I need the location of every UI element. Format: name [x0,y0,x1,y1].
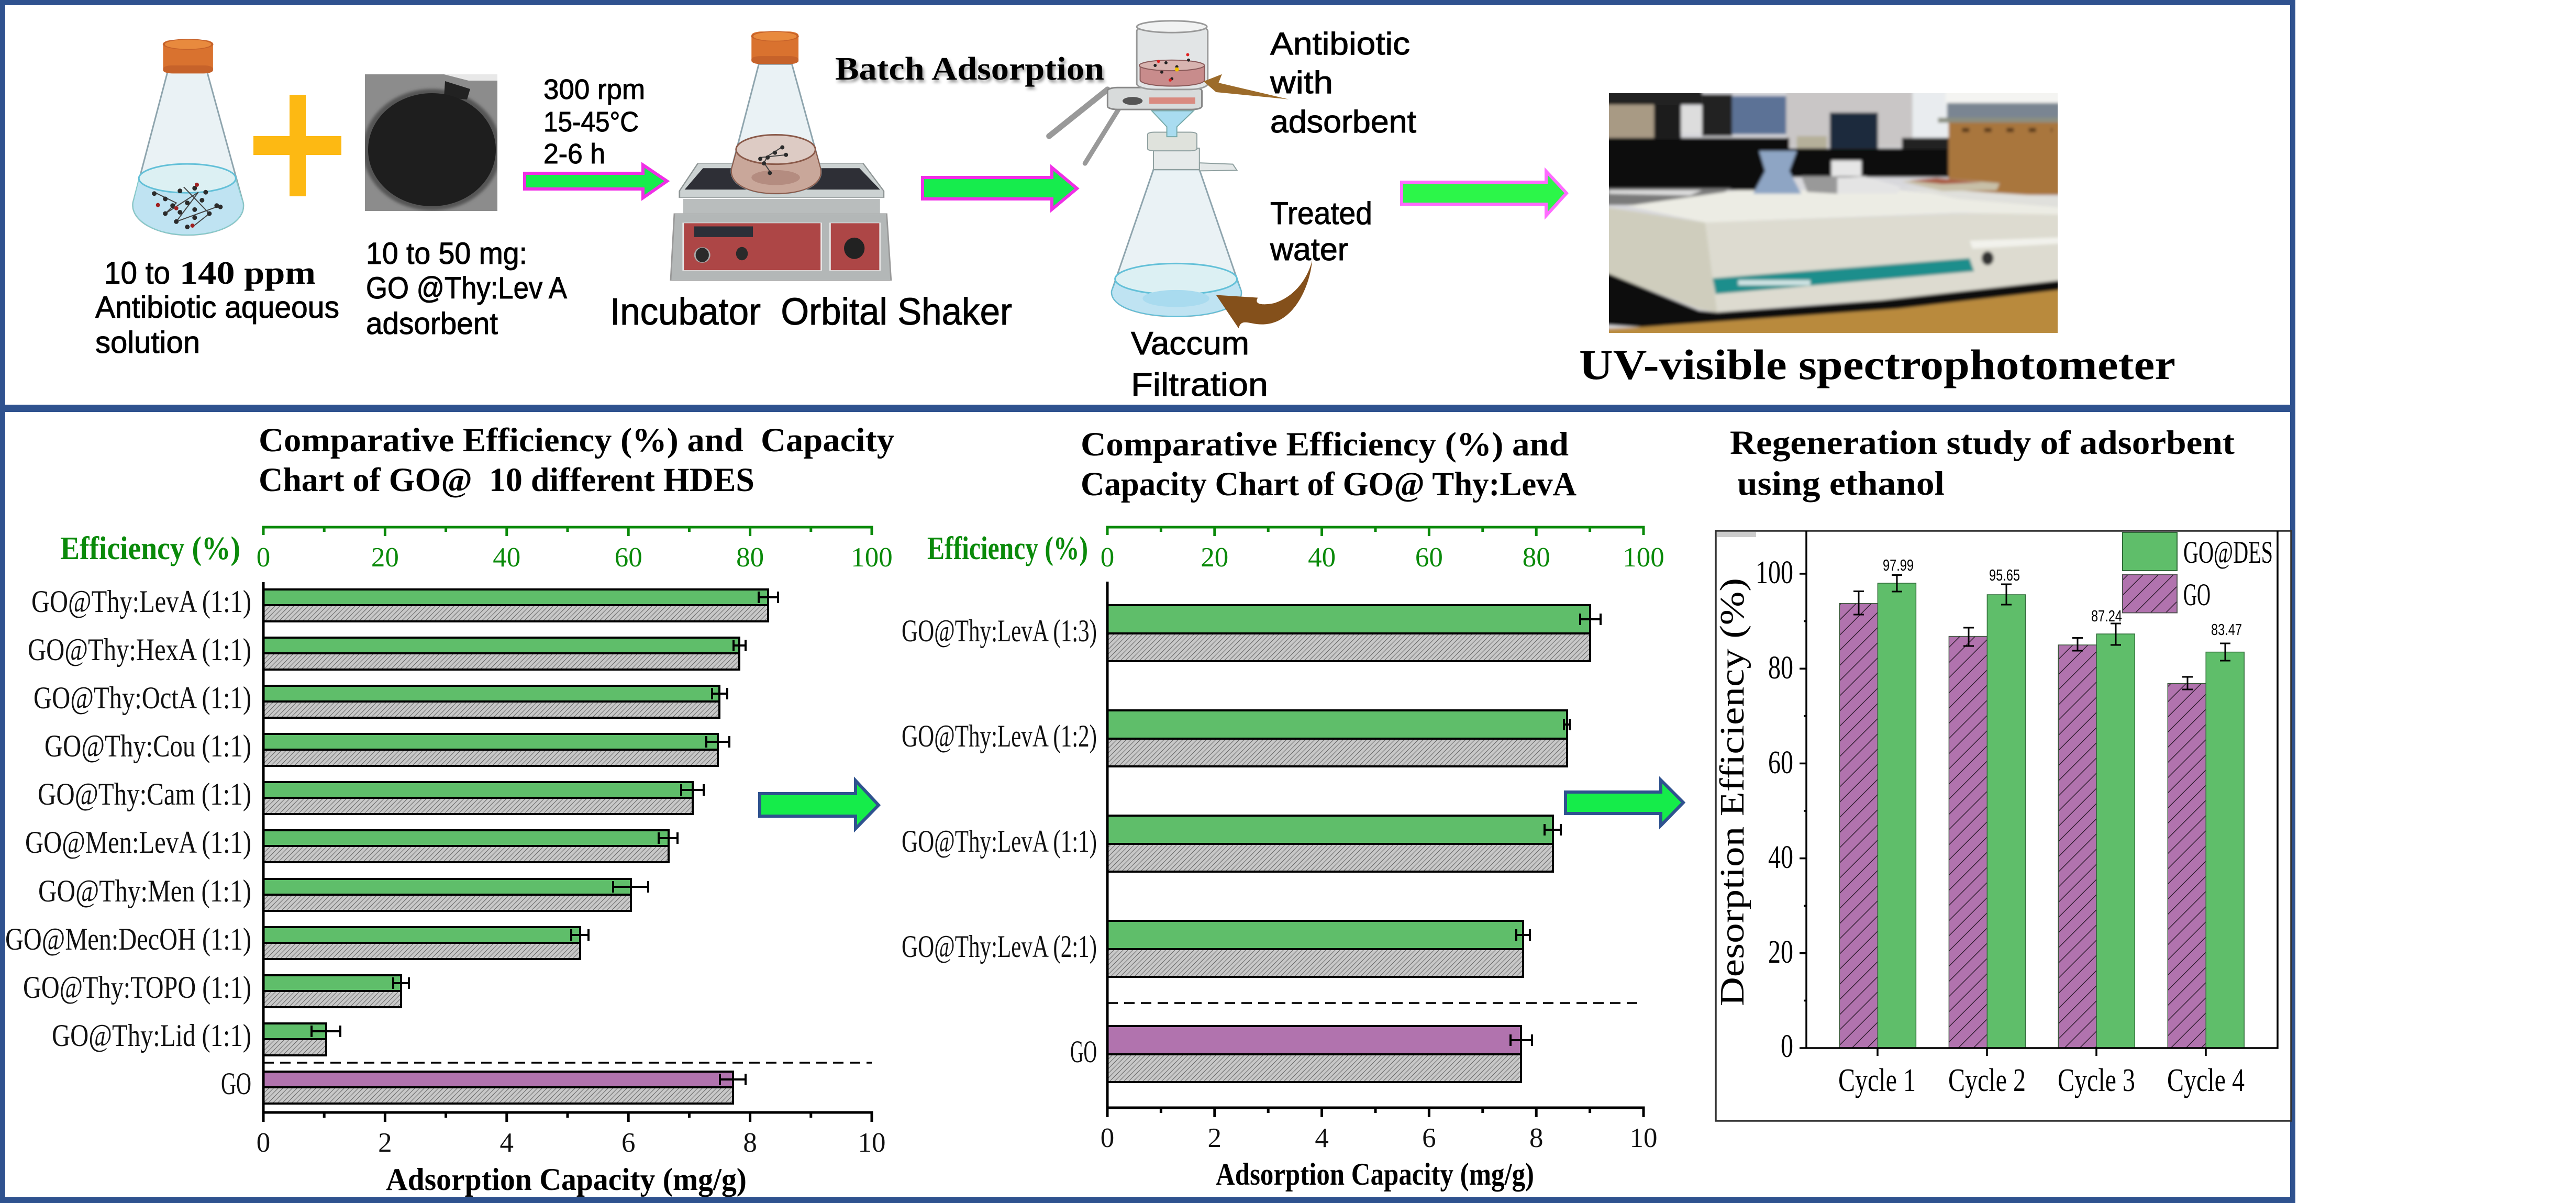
axis: capacity bottom axis: Adsorption Capacity (mg/g) [386,1162,747,1197]
axis labels: desorption y: 100 [1756,555,1793,591]
panel: regeneration study [1713,424,2291,1121]
icon: incubator orbital shaker [671,163,891,281]
axis: efficiency top axis: 20 [371,542,399,573]
labels: HDES categories: GO@Thy:HexA (1:1) [28,632,251,667]
axis: efficiency top axis: 80 [1523,542,1550,573]
chart: desorption bars GO [1839,604,2206,1048]
text: shaking conditions: 15-45°C [543,106,639,138]
arrow: to shaker [525,165,667,198]
heading: chart 1 title: Chart of GO@ 10 different HDES [259,461,754,499]
axis: efficiency top axis: 0 [257,542,270,573]
chart: desorption error bars [1853,575,2230,689]
axis: capacity bottom axis: 10 [1629,1123,1658,1153]
axis labels: desorption y: 20 [1768,934,1793,970]
arrow: treated water pointer [1216,260,1312,328]
axis labels: cycles: Cycle 2 [1948,1063,2026,1098]
text: treated water [1270,196,1372,267]
axis labels: cycles: Cycle 1 [1838,1063,1916,1098]
labels: ratio categories: GO [1070,1034,1097,1069]
axis: capacity bottom axis: 4 [500,1128,514,1158]
heading: chart 2 title [1081,426,1576,503]
text: shaker label: Incubator Orbital Shaker [610,291,1012,333]
value labels: 83.47 [2211,620,2242,639]
labels: HDES categories: GO@Thy:LevA (1:1) [31,584,251,619]
axis labels: cycles: Cycle 4 [2167,1063,2245,1098]
text: treated water: Treated [1270,196,1372,231]
text: antibiotic with adsorbent [1270,26,1416,139]
chart: ratio bars [1107,605,1590,1082]
arrow: to spectrophotometer [1402,171,1567,216]
value labels: 87.24 [2091,607,2122,625]
axis: efficiency top axis [60,527,893,573]
heading: UV-visible spectrophotometer: UV-visible spectrophotometer [1579,341,2175,388]
chart: ratio error bars [1511,614,1601,1046]
arrow: adsorbent pointer [1204,74,1289,99]
labels: ratio categories: GO@Thy:LevA (1:2) [902,719,1097,753]
labels: HDES categories: GO@Men:LevA (1:1) [25,825,251,860]
arrow: to chart 2 [760,781,879,829]
axis labels: desorption y: 80 [1768,650,1793,686]
labels: HDES categories: GO@Thy:Cou (1:1) [45,729,251,763]
icon: flask on shaker [731,31,821,194]
icon: vacuum filtration apparatus [1049,21,1241,316]
legend [2123,532,2273,612]
legend line: baseline separator [263,1062,872,1064]
heading: chart 1 title: Comparative Efficiency (%) and Capacity [259,421,894,459]
axis labels: cycles [1838,1063,2245,1098]
heading: chart 3 title [1730,424,2235,503]
chart box [1716,531,2291,1121]
axis: efficiency top axis: 20 [1201,542,1228,573]
text: adsorbent dose: adsorbent [366,307,498,341]
labels: ratio categories: GO@Thy:LevA (1:3) [902,614,1097,648]
heading: chart 3 title: Regeneration study of adsorbent [1730,424,2235,462]
labels: HDES categories: GO@Thy:OctA (1:1) [34,681,251,715]
axis: efficiency top axis: 100 [851,542,893,573]
axis: capacity bottom axis: 6 [1422,1123,1436,1153]
text: antibiotic concentration: Antibiotic aqueous [95,291,339,325]
panel: comparison of 10 HDES [5,421,894,1197]
axis: efficiency top axis: 60 [615,542,642,573]
labels: HDES categories: GO@Thy:TOPO (1:1) [23,970,251,1005]
value labels [1883,556,2242,639]
panel: batch adsorption workflow [95,21,2175,403]
heading: batch adsorption: Batch Adsorption [835,51,1104,87]
chart: HDES bars [263,589,768,1104]
heading: chart 3 title: using ethanol [1737,465,1945,503]
axis labels: desorption y: 60 [1768,745,1793,781]
axis labels: desorption y: Desorption Efficiency (%) [1713,578,1751,1006]
axis: efficiency top axis: 0 [1101,542,1114,573]
legend: GO@DES [2183,535,2273,570]
labels: ratio categories: GO@Thy:LevA (1:1) [902,824,1097,859]
axis: capacity bottom axis: 2 [1208,1123,1222,1153]
labels: HDES categories: GO@Thy:Lid (1:1) [52,1018,251,1053]
axis: efficiency top axis: Efficiency (%) [927,531,1088,566]
axis labels: desorption y: 40 [1768,840,1793,875]
axis: capacity bottom axis: 2 [378,1128,392,1158]
axis: capacity bottom axis: 8 [743,1128,757,1158]
text: antibiotic concentration: 140 ppm [180,255,316,291]
image: black GO adsorbent in dish [363,74,501,211]
axis: efficiency top axis: 60 [1415,542,1443,573]
axis: capacity bottom axis: 4 [1315,1123,1329,1153]
text: antibiotic with adsorbent: adsorbent [1270,104,1416,139]
labels: HDES categories: GO@Men:DecOH (1:1) [5,922,251,956]
value labels: 97.99 [1883,556,1914,574]
axis: efficiency top axis [927,527,1664,573]
axis: efficiency top axis: Efficiency (%) [60,531,240,566]
text: antibiotic concentration: solution [95,326,200,360]
labels: ratio categories [902,614,1097,1069]
axis: capacity bottom axis [257,582,886,1197]
text: antibiotic concentration: 10 to [104,255,170,291]
axis: capacity bottom axis: 0 [257,1128,270,1158]
labels: ratio categories: GO@Thy:LevA (2:1) [902,929,1097,964]
axis: capacity bottom axis [1101,582,1658,1191]
heading: chart 2 title: Comparative Efficiency (%) and [1081,426,1569,463]
heading: chart 1 title [259,421,894,499]
axis: capacity bottom axis: 10 [858,1128,886,1158]
text: shaking conditions [543,74,645,170]
axis: capacity bottom axis: 8 [1529,1123,1543,1153]
icon: antibiotic solution flask [133,39,243,235]
chart: HDES error bars [312,592,778,1085]
chart: desorption bars GO@DES [1878,583,2244,1048]
axis: efficiency top axis: 100 [1623,542,1664,573]
arrow: to filtration [923,168,1077,209]
heading: chart 2 title: Capacity Chart of GO@ Thy:LevA [1081,465,1576,503]
text: shaking conditions: 300 rpm [543,74,645,105]
text: adsorbent dose: GO @Thy:Lev A [366,271,567,305]
text: antibiotic with adsorbent: Antibiotic [1270,26,1410,61]
text: adsorbent dose [366,237,567,341]
text: shaking conditions: 2-6 h [543,138,605,170]
text: vacuum filtration: Filtration [1131,367,1268,403]
axis: capacity bottom axis: Adsorption Capacity (mg/g) [1216,1157,1534,1191]
axis labels: cycles: Cycle 3 [2058,1063,2135,1098]
axis labels: desorption y [1713,555,1793,1064]
image: spectrophotometer photo [1603,91,2063,335]
labels: HDES categories: GO@Thy:Men (1:1) [38,874,251,908]
axis: efficiency top axis: 40 [1308,542,1336,573]
axis labels: desorption y: 0 [1781,1029,1793,1064]
legend: GO [2183,577,2211,612]
labels: HDES categories [5,584,251,1101]
axis: capacity bottom axis: 0 [1101,1123,1114,1153]
text: antibiotic concentration [95,255,339,360]
text: adsorbent dose: 10 to 50 mg: [366,237,527,271]
text: antibiotic with adsorbent: with [1270,65,1333,100]
arrow: to chart 3 [1565,780,1683,826]
icon: plus sign [253,95,341,196]
chart: plot frame and axes [1800,531,2278,1056]
axis: efficiency top axis: 40 [493,542,520,573]
axis: efficiency top axis: 80 [736,542,764,573]
text: vacuum filtration [1131,326,1268,403]
value labels: 95.65 [1989,566,2020,584]
text: vacuum filtration: Vaccum [1131,326,1249,362]
axis: capacity bottom axis: 6 [621,1128,635,1158]
panel: GO@Thy:LevA ratios [902,426,1683,1191]
labels: HDES categories: GO@Thy:Cam (1:1) [38,777,251,811]
labels: HDES categories: GO [221,1066,251,1101]
text: treated water: water [1270,232,1348,267]
legend line: baseline separator [1107,1002,1644,1004]
